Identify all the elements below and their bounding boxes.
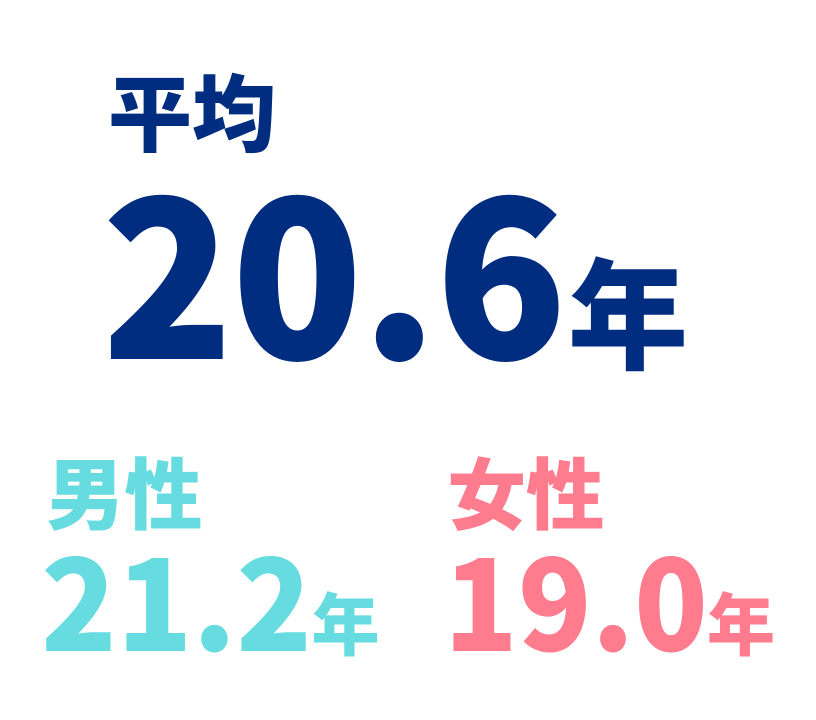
value: average 20.6 years: 20.6 <box>103 110 566 420</box>
value: male 21.2 years: 21.2 <box>41 506 312 687</box>
value: female 19.0 years: 19.0 <box>444 506 708 687</box>
value: average 20.6 years: 年 <box>568 220 688 394</box>
value: female 19.0 years: 年 <box>707 571 775 670</box>
heading: male: 男性 <box>46 434 202 546</box>
heading: female: 女性 <box>448 434 604 546</box>
heading: average: 平均 <box>108 49 276 170</box>
value: male 21.2 years: 年 <box>312 571 380 670</box>
